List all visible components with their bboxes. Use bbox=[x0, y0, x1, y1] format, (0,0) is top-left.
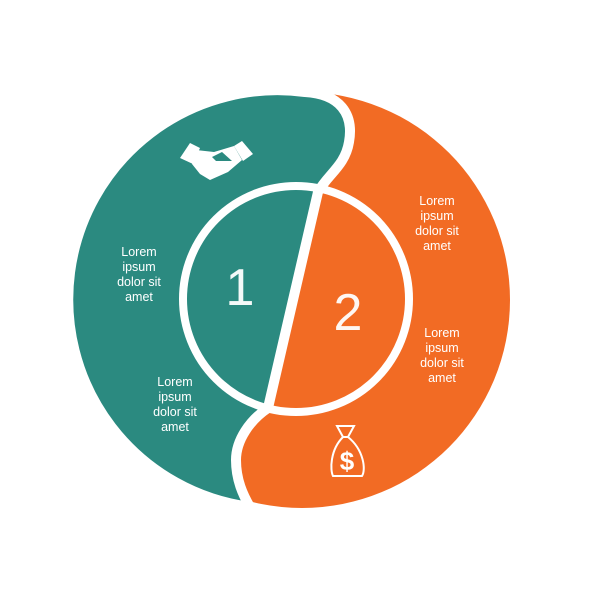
text block: right lower: Lorem bbox=[424, 326, 460, 340]
text block: left lower: ipsum bbox=[158, 390, 192, 404]
text block: left lower: dolor sit bbox=[153, 405, 197, 419]
text block: right lower bbox=[420, 326, 464, 385]
icon: money bag: $ bbox=[340, 446, 355, 476]
text block: right lower: dolor sit bbox=[420, 356, 464, 370]
text block: right upper: ipsum bbox=[420, 209, 454, 223]
text block: left upper: Lorem bbox=[121, 245, 157, 259]
text block: right upper: amet bbox=[423, 239, 451, 253]
text block: right upper: Lorem bbox=[419, 194, 455, 208]
text block: right upper: dolor sit bbox=[415, 224, 459, 238]
text block: left upper: amet bbox=[125, 290, 153, 304]
text block: left lower: amet bbox=[161, 420, 189, 434]
icon: money bag bbox=[331, 426, 364, 476]
text block: left upper: ipsum bbox=[122, 260, 156, 274]
segment 1: teal bbox=[68, 90, 350, 507]
text block: left lower bbox=[153, 375, 197, 434]
text block: right upper bbox=[415, 194, 459, 253]
text block: right lower: ipsum bbox=[425, 341, 459, 355]
inner ring bbox=[183, 186, 409, 412]
text block: left upper: dolor sit bbox=[117, 275, 161, 289]
text block: left lower: Lorem bbox=[157, 375, 193, 389]
number 2: 2 bbox=[334, 284, 362, 342]
icon: handshake bbox=[180, 141, 253, 180]
text block: right lower: amet bbox=[428, 371, 456, 385]
text block: left upper bbox=[117, 245, 161, 304]
number 1: 1 bbox=[226, 259, 254, 317]
segment 2: orange bbox=[94, 92, 510, 508]
